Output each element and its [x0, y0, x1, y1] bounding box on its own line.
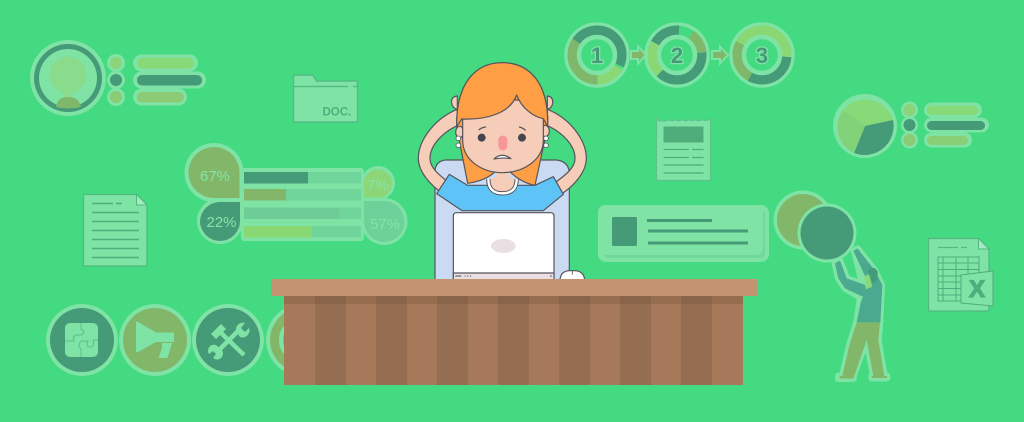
illustration: stressed woman: [418, 63, 586, 280]
icon: folder labelled DOC.: DOC.: [322, 106, 351, 118]
bubble 7%: 7%: [367, 177, 389, 194]
arrow 1 to 2: [631, 46, 646, 64]
figure: [835, 249, 887, 379]
chair: [435, 160, 569, 280]
icon: puzzle badge: [46, 304, 118, 376]
icon: excel spreadsheet: [928, 238, 993, 311]
step 1: [566, 24, 628, 86]
icon: folder labelled DOC.: [294, 75, 358, 122]
card: text callout: [598, 205, 769, 262]
arrow 2 to 3: [712, 46, 728, 64]
chart: percentage bubbles and bars: [184, 143, 408, 245]
illustration: man lifting circles: [774, 190, 887, 379]
chart: pie with legend: [833, 94, 989, 158]
step 2: [646, 24, 708, 86]
bubble 22%: 22%: [206, 214, 237, 231]
eyes: [478, 134, 526, 142]
bangs: [457, 63, 548, 127]
step 1: 1: [591, 43, 603, 68]
brows: [479, 127, 526, 130]
bar panel: [241, 168, 364, 241]
bubble 67%: [184, 143, 244, 202]
earrings: [456, 136, 548, 148]
hair back: [457, 63, 548, 185]
bubble 7%: [361, 166, 395, 200]
bubble 57%: [361, 198, 408, 245]
arms: [418, 96, 586, 194]
nose: [498, 136, 507, 150]
step 3: [731, 24, 793, 86]
bubble 67%: 67%: [200, 168, 230, 185]
neck: [488, 168, 517, 193]
step 3: 3: [756, 43, 768, 68]
bubble 57%: 57%: [370, 216, 400, 233]
icon: megaphone badge: [119, 304, 191, 376]
collar: [488, 179, 517, 193]
step 2: 2: [671, 43, 683, 68]
bubble 22%: [197, 198, 243, 244]
icon: excel spreadsheet: X: [969, 276, 985, 303]
circle olive: [774, 190, 832, 250]
shirt: [437, 174, 563, 211]
icon: fourth badge behind desk: [266, 304, 338, 376]
desk: [271, 279, 757, 385]
icon: receipt: [656, 118, 710, 180]
icon: tools badge: [192, 304, 264, 376]
icon: user profile with list: [30, 40, 206, 116]
mouse: [560, 271, 585, 280]
steps: numbered process rings: [566, 24, 793, 86]
circle dark: [798, 204, 856, 262]
icon: document: [84, 194, 147, 266]
mouth: [494, 155, 511, 159]
face: [463, 100, 543, 173]
laptop: [453, 213, 554, 280]
ears: [456, 125, 549, 138]
